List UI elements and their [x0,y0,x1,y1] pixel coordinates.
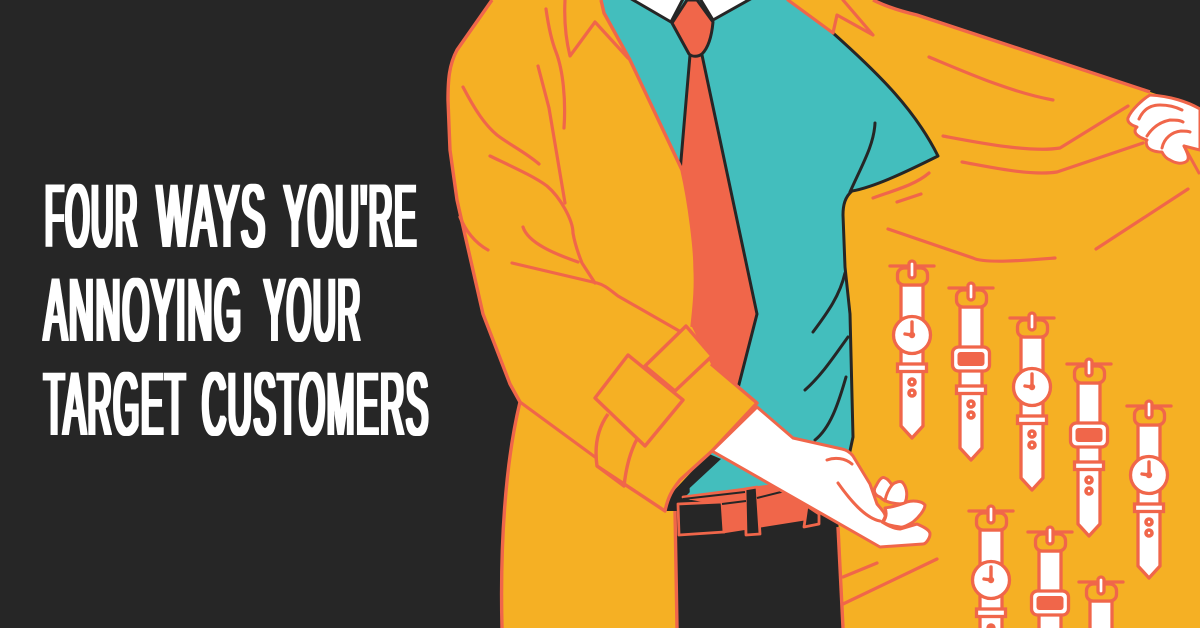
watch 3: clock [1010,313,1054,490]
infographic canvas: CUSTOMERS [202,354,430,454]
title: ANNOYING [44,260,243,360]
title: TARGET [44,354,187,454]
infographic canvas: YOU'RE [284,166,418,266]
white collar [628,0,754,22]
belt [678,484,819,535]
right coat fold lines [843,57,1188,604]
shirt outline and wrinkles [805,33,938,451]
left hand [712,407,930,547]
title: WAYS [157,166,267,266]
trousers [675,490,843,628]
watch 7: rectangular, cut off by bottom edge [1028,527,1072,628]
watch 5: clock [1127,401,1171,578]
title [44,166,430,454]
cuff straps [595,326,712,486]
teal shirt [600,0,938,500]
watch 4: rectangular [1067,359,1111,536]
watch 6: clock, cut off by bottom edge [969,506,1013,628]
watch 8: strap cut off by bottom edge [1079,577,1123,628]
sleeve end [595,364,757,511]
left coat [448,0,757,628]
right coat panel [788,0,1200,628]
illustration: man in coat [448,0,1200,628]
watch 1: clock [890,261,934,438]
title: YOUR [264,260,362,360]
teal lower shirt [686,459,800,500]
black wedge under sleeve [668,453,721,506]
watch 2: rectangular [949,283,993,460]
tie [672,0,757,400]
right coat top outline [873,0,1150,92]
right hand [1128,95,1200,173]
title: FOUR [45,166,139,266]
coat collar and fold lines [460,0,873,457]
